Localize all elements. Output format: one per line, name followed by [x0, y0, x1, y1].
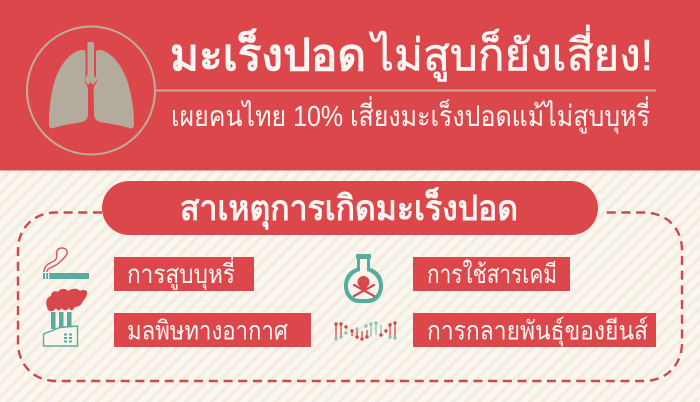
title: ไม่สูบก็ยังเสี่ยง! [369, 24, 653, 82]
icon: cigarette [43, 248, 89, 279]
heading pill [102, 181, 598, 235]
reason 3: การใช้สารเคมี [427, 259, 557, 289]
reason 1: การสูบบุหรี่ [127, 256, 235, 290]
header banner [0, 0, 700, 170]
reason 4: การกลายพันธุ์ของยีนส์ [427, 316, 648, 346]
icon: factory [44, 289, 87, 346]
icon: poison bottle [344, 254, 383, 303]
icon: DNA helix [334, 321, 397, 341]
title: มะเร็งปอด [170, 28, 366, 80]
reason 2: มลพิษทางอากาศ [127, 316, 288, 346]
title [170, 24, 653, 82]
heading pill: สาเหตุการเกิดมะเร็งปอด [180, 186, 518, 230]
striped background [0, 170, 700, 402]
icon: lungs in circle [27, 26, 155, 154]
dashed frame [18, 212, 682, 381]
divider line [156, 90, 656, 92]
